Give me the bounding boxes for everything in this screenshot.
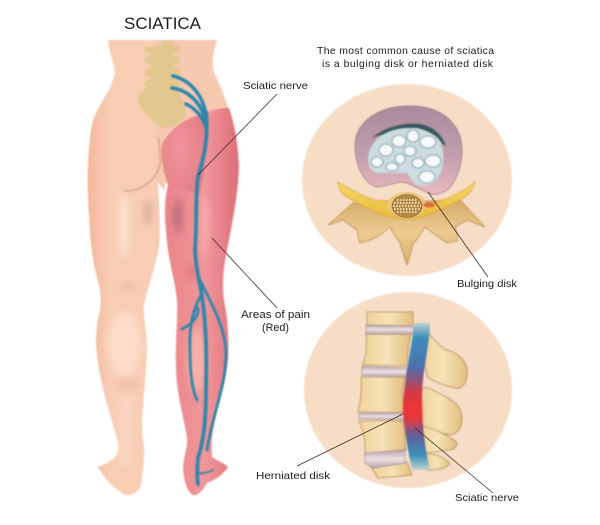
- label: areas of pain: (Red): [262, 322, 289, 334]
- label: sciatic nerve: Sciatic nerve: [243, 81, 308, 92]
- left leg (no pain): [88, 40, 176, 495]
- title: SCIATICA: [124, 15, 201, 33]
- right leg: areas of pain: [162, 108, 239, 495]
- buttock crease lines: [124, 137, 200, 192]
- skin of right hip: [158, 40, 230, 190]
- intervertebral disks: [359, 325, 413, 468]
- right gluteal pain area: [162, 115, 206, 192]
- leader line: areas of pain: [212, 238, 277, 308]
- label: areas of pain: Areas of pain: [241, 309, 310, 321]
- spinal nerve column: [403, 323, 430, 470]
- panel: bulging disk cross-section: [302, 84, 512, 276]
- vertebrae: [358, 312, 413, 478]
- leader line: bulging disk: [428, 192, 488, 277]
- spinal cord: [392, 194, 422, 218]
- yellow lamina band: [338, 182, 475, 219]
- label: bulging disk: Bulging disk: [457, 279, 518, 290]
- leader line: herniated disk: [297, 414, 403, 466]
- label: herniated disk: Herniated disk: [256, 471, 331, 482]
- label: sciatic nerve in spine: Sciatic nerve: [455, 493, 519, 504]
- disk annulus: [355, 106, 462, 194]
- disk nucleus: [368, 128, 444, 186]
- panel background circle: [302, 84, 512, 276]
- caption: most common cause: is a bulging disk or herniated disk: [322, 59, 494, 70]
- dark inner rim: [372, 124, 446, 146]
- nerve irritation spot: [423, 202, 435, 208]
- leader line: sciatic nerve in spine: [415, 428, 493, 493]
- nucleus lobes: [371, 130, 441, 183]
- vertebral arch and spinous processes: [328, 200, 485, 265]
- sciatic nerve: [172, 76, 226, 484]
- cord dots: [393, 200, 421, 212]
- lumbar spine and sacrum: [138, 41, 186, 128]
- panel: herniated disk side view: [304, 292, 512, 488]
- caption: most common cause: The most common cause of sciatica: [317, 46, 494, 57]
- leader line: sciatic nerve on body: [198, 94, 277, 175]
- illustration: back of body with sciatic nerve: [88, 40, 239, 495]
- facet processes: [418, 330, 467, 470]
- spinal canal: [388, 192, 426, 218]
- panel background circle: [304, 292, 512, 488]
- herniation compression hot spot: [405, 398, 421, 426]
